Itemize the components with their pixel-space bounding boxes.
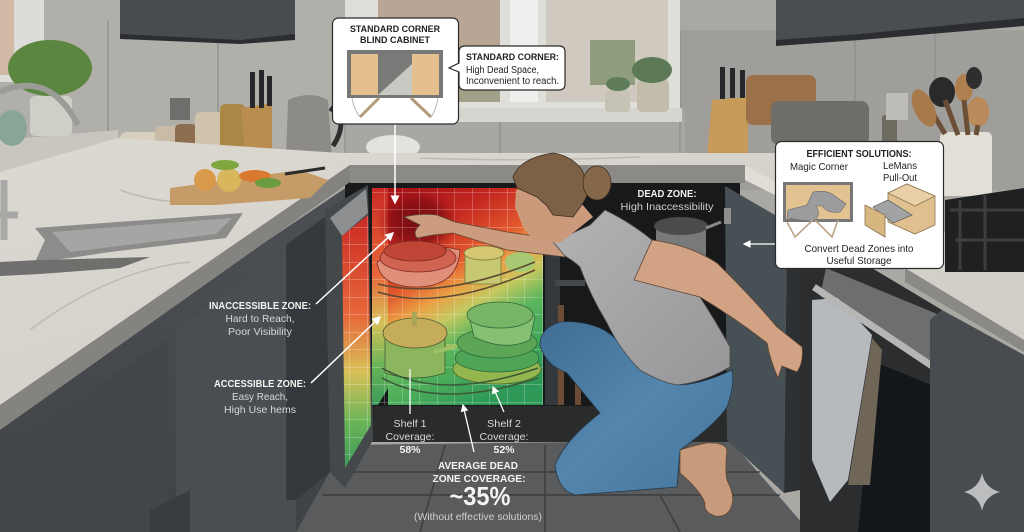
arrow: average dead zone	[463, 405, 474, 452]
upper cabinets	[120, 0, 1024, 46]
arrow: accessible zone	[311, 317, 380, 383]
arrow: solutions to door	[744, 243, 776, 245]
open left cabinet door with heat overlay	[325, 185, 373, 488]
label: shelf 2 coverage: Coverage:	[480, 431, 528, 443]
arrow: shelf 1	[409, 369, 411, 414]
label: dead zone: High Inaccessibility	[620, 201, 714, 213]
left windowsill with plant	[0, 40, 118, 172]
callout: efficient solutions	[776, 142, 944, 268]
floor tiles	[296, 440, 810, 532]
label: accessible zone: ACCESSIBLE ZONE:	[214, 379, 306, 390]
note heading: STANDARD CORNER:	[466, 52, 559, 63]
label: shelf 1 coverage	[386, 418, 434, 456]
label: inaccessible zone	[209, 301, 311, 338]
lower cabinets left	[0, 185, 350, 532]
cooktop	[945, 188, 1024, 272]
label: average dead zone coverage: AVERAGE DEAD	[438, 460, 518, 472]
reaching arm	[404, 214, 565, 257]
label: accessible zone: Easy Reach,	[232, 391, 288, 403]
lower shelf with pots and pans	[382, 302, 541, 394]
hair bun	[583, 166, 611, 200]
heading line 2: BLIND CABINET	[360, 35, 430, 46]
label: magic corner: Magic Corner	[790, 161, 848, 173]
upper shelf with bowls	[377, 241, 535, 298]
sink with faucet	[0, 180, 243, 276]
label: shelf 2 coverage: Shelf 2	[487, 418, 521, 430]
cabinet interior: dark void	[345, 180, 740, 442]
arrow: shelf 2	[493, 387, 504, 412]
counter items right: knife block, board, toaster, utensils	[707, 67, 992, 196]
label: shelf 1 coverage: Shelf 1	[394, 418, 427, 430]
label: shelf 1 coverage: 58%	[399, 444, 421, 456]
label: average dead zone coverage: (Without effective solutions)	[414, 511, 542, 523]
label: accessible zone	[214, 379, 306, 416]
window	[0, 0, 682, 122]
label: average dead zone coverage	[414, 460, 542, 523]
arrow: corner card to cabinet	[394, 124, 396, 203]
heading: blind cabinet: STANDARD CORNER	[350, 24, 440, 35]
solutions heading: EFFICIENT SOLUTIONS:	[806, 149, 912, 160]
label: average dead zone coverage: ~35%	[450, 481, 510, 511]
note line 1: High Dead Space,	[466, 65, 539, 76]
woman crouching and reaching	[404, 153, 802, 516]
bare foot	[680, 443, 733, 516]
label: shelf 2 coverage	[480, 418, 528, 456]
neck and face	[515, 180, 593, 243]
label: average dead zone coverage: ZONE COVERAGE:	[432, 473, 526, 485]
floor sparkle logo	[964, 473, 1000, 511]
label: dead zone	[620, 189, 714, 213]
label: inaccessible zone: Poor Visibility	[228, 326, 293, 338]
t-shirt	[553, 210, 730, 385]
label: inaccessible zone: Hard to Reach,	[226, 313, 294, 325]
label: pull-out line: Pull-Out	[883, 172, 917, 184]
diagram: magic corner	[783, 182, 853, 237]
label: dead zone: DEAD ZONE:	[638, 189, 696, 200]
cutting board with vegetables	[170, 160, 328, 205]
label: accessible zone: High Use hems	[224, 404, 296, 416]
counter items left: jars, knife block, kettle, bowl	[120, 57, 672, 190]
oven with towel	[800, 225, 942, 532]
hair	[513, 153, 590, 217]
arrow: inaccessible zone	[316, 233, 393, 304]
diagram: lemans pull-out	[865, 184, 935, 237]
dead zone pot	[654, 217, 721, 263]
callout: standard corner note	[449, 46, 565, 90]
label: shelf 2 coverage: 52%	[493, 444, 515, 456]
bracing arm	[634, 240, 802, 378]
countertops	[0, 138, 1024, 430]
callout: standard corner blind cabinet	[332, 18, 458, 124]
solutions caption line 2: Useful Storage	[826, 255, 892, 267]
label: inaccessible zone: INACCESSIBLE ZONE:	[209, 301, 311, 312]
right lower cabinet	[930, 310, 1024, 532]
right cabinet door	[724, 186, 800, 493]
jeans	[540, 322, 733, 495]
label: lemans pull-out: LeMans	[883, 160, 917, 172]
solutions caption line 1: Convert Dead Zones into	[804, 243, 914, 255]
label: shelf 1 coverage: Coverage:	[386, 431, 434, 443]
diagram: blind cabinet plan	[347, 50, 443, 117]
heat map of cabinet interior	[372, 188, 543, 405]
note line 2: Inconvenient to reach.	[466, 76, 559, 87]
